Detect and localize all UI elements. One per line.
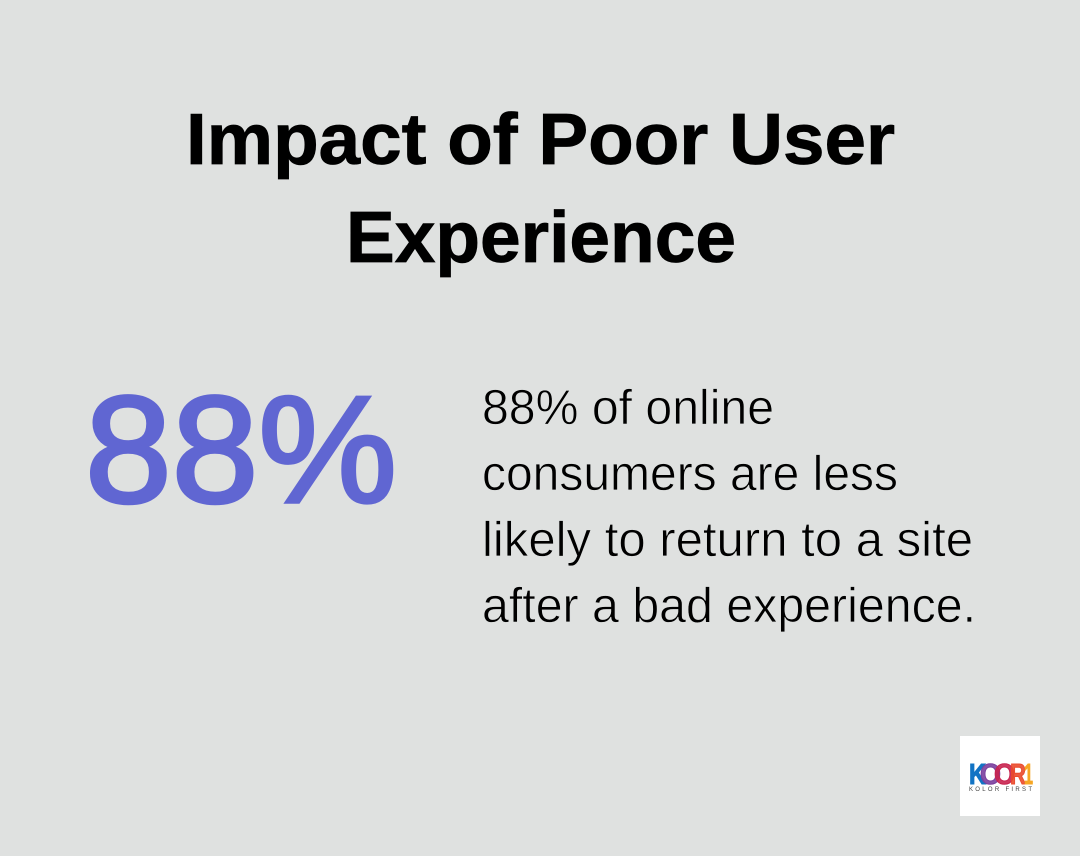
logo tagline: KOLOR FIRST bbox=[969, 787, 1032, 793]
statistic description: consumers are less bbox=[482, 447, 898, 501]
statistic description: 88% of online bbox=[482, 381, 774, 435]
logo wordmark: O bbox=[994, 759, 1015, 791]
title: Experience bbox=[346, 198, 736, 278]
big statistic: 88%: 88% bbox=[85, 365, 397, 535]
statistic description: after a bad experience. bbox=[482, 579, 976, 633]
statistic description bbox=[482, 381, 976, 633]
logo: Koor1 Kolor First bbox=[960, 736, 1040, 816]
statistic description: likely to return to a site bbox=[482, 513, 973, 567]
title: Impact of Poor User bbox=[186, 100, 895, 180]
logo wordmark: K bbox=[969, 759, 986, 791]
logo wordmark: 1 bbox=[1024, 759, 1033, 791]
logo wordmark: O bbox=[980, 759, 1001, 791]
logo wordmark bbox=[969, 759, 1033, 791]
title bbox=[186, 100, 895, 278]
logo wordmark: R bbox=[1010, 759, 1026, 791]
